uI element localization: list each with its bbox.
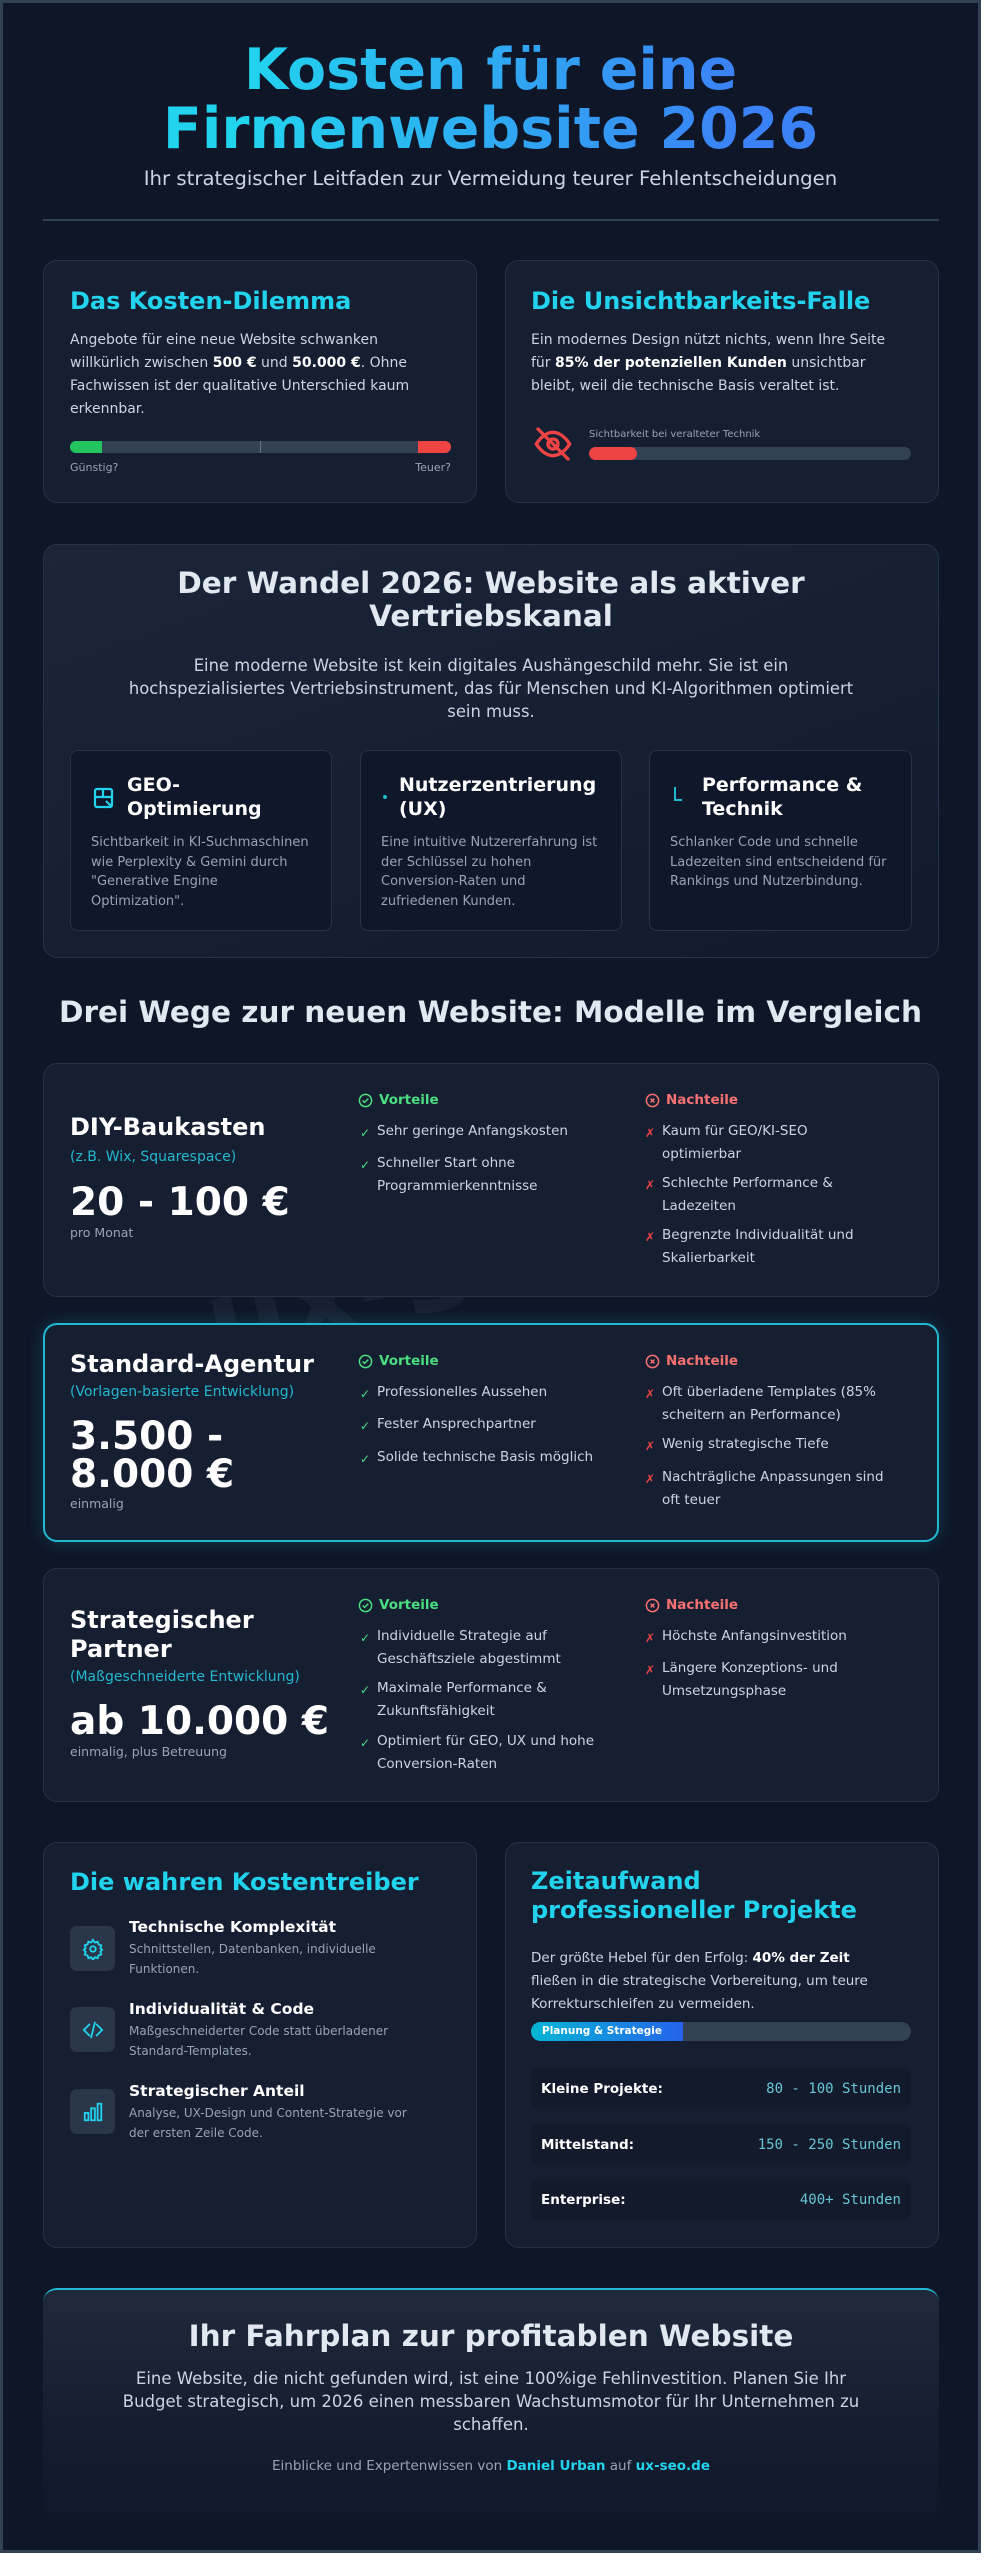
text: Kosten-Dilemma: willkürlich zwischen 500 € und 50.000 €. Ohne: [70, 355, 407, 371]
bar labels: Teuer?: [415, 461, 451, 474]
list: Standard Vorteile: Vorteile: [379, 1353, 439, 1369]
list: DIY Nachteile: Kaum für GEO/KI-SEO: [662, 1123, 808, 1139]
list: Partner Vorteile: Optimiert für GEO, UX und hohe: [377, 1733, 594, 1749]
list: Partner Nachteile: Umsetzungsphase: [662, 1682, 786, 1698]
row: Kleine Projekte: [531, 2068, 911, 2109]
icon: code: [70, 2007, 115, 2052]
text: Unsichtbarkeits-Falle: [531, 332, 885, 394]
row: Enterprise: Enterprise:: [541, 2192, 626, 2208]
model info: DIY: 20 - 100 €: [70, 1180, 290, 1225]
desc: GEO: Optimization".: [91, 894, 184, 909]
list: Partner Vorteile: ✓: [360, 1631, 370, 1645]
model info: Standard-Agentur: Standard-Agentur: [70, 1350, 314, 1378]
heading: Unsichtbarkeits-Falle: Die Unsichtbarkeits-Falle: [531, 287, 870, 315]
text: Fahrplan: schaffen.: [453, 2415, 529, 2434]
text: Kosten-Dilemma: Fachwissen ist der qualitative Unterschied kaum: [70, 378, 409, 394]
title: Firmenwebsite 2026: [163, 96, 818, 162]
model info: DIY: pro Monat: [70, 1225, 133, 1240]
list: DIY Nachteile: ✗: [645, 1178, 655, 1192]
list: Standard Nachteile: scheitern an Performance): [662, 1406, 841, 1422]
model info: Standard-Agentur: [70, 1350, 314, 1511]
list: Standard Nachteile: Nachteile: [666, 1353, 738, 1369]
title: Kosten für eine: [244, 37, 737, 103]
list: DIY Nachteile: Schlechte Performance &: [662, 1175, 833, 1191]
desc: Performance: [670, 835, 887, 889]
progress bar: Planung: Planung & Strategie: [542, 2025, 662, 2037]
subcard: GEO: [70, 750, 332, 931]
title: UX: [399, 774, 596, 820]
item: Strategischer Anteil: Strategischer Anteil: [129, 2082, 305, 2100]
item: Individualität & Code: [70, 2000, 388, 2058]
desc: UX: [381, 835, 597, 909]
list: Standard Nachteile: ✗: [645, 1472, 655, 1486]
icon: eye slash: [534, 427, 572, 461]
list: Partner Nachteile: Nachteile: [666, 1597, 738, 1613]
credit: Einblicke und Expertenwissen von Daniel Urban auf ux-seo.de: [272, 2458, 710, 2474]
panel: DIY-Baukasten: [43, 1063, 939, 1297]
text: Unsichtbarkeits-Falle: bleibt, weil die technische Basis veraltet ist.: [531, 378, 839, 394]
list: DIY Vorteile: Vorteile: [379, 1092, 439, 1108]
model info: Standard-Agentur: einmalig: [70, 1496, 124, 1511]
heading: Der Wandel: [177, 566, 805, 633]
desc: Performance: Schlanker Code und schnelle: [670, 835, 858, 850]
item: Strategischer Anteil: Analyse, UX-Design und Content-Strategie vor: [129, 2106, 407, 2120]
list: Partner Vorteile: Vorteile: [379, 1597, 439, 1613]
text: Wandel intro: hochspezialisiertes Vertriebsinstrument, das für Menschen und KI-Algorithmen optimiert: [129, 679, 853, 698]
list: Partner Vorteile: Individuelle Strategie auf: [377, 1628, 547, 1644]
panel: Zeitaufwand: [505, 1842, 939, 2248]
progress bar: Planung: [531, 2022, 911, 2041]
desc: GEO: "Generative Engine: [91, 874, 218, 889]
item: Strategischer Anteil: der ersten Zeile Code.: [129, 2126, 263, 2140]
list: DIY Nachteile: optimierbar: [662, 1146, 741, 1162]
bar labels: Günstig?: [70, 461, 118, 474]
panel: Standard-Agentur: [43, 1323, 939, 1542]
list: Partner Vorteile: Geschäftsziele abgestimmt: [377, 1650, 561, 1666]
list: Partner Vorteile: ✓: [360, 1683, 370, 1697]
list: DIY Nachteile: Nachteile: [666, 1092, 738, 1108]
list: Standard Nachteile: ✗: [645, 1439, 655, 1453]
icon: performance: [674, 787, 682, 801]
panel: Unsichtbarkeits-Falle: [505, 260, 939, 503]
list: DIY Nachteile: Skalierbarkeit: [662, 1250, 755, 1266]
text: Fahrplan: Budget strategisch, um 2026 einen messbaren Wachstumsmotor für Ihr Unternehmen zu: [123, 2392, 859, 2411]
text: Kosten-Dilemma: erkennbar.: [70, 401, 145, 417]
heading: Kostentreiber: Die wahren Kostentreiber: [70, 1868, 419, 1896]
row: Enterprise: [531, 2179, 911, 2220]
list: Standard Nachteile: Wenig strategische Tiefe: [662, 1436, 829, 1452]
list: DIY Vorteile: [358, 1092, 568, 1194]
desc: UX: der Schlüssel zu hohen: [381, 855, 531, 870]
list: Partner Nachteile: Höchste Anfangsinvestition: [662, 1628, 847, 1644]
model info: Strategischer Partner: einmalig, plus Betreuung: [70, 1744, 227, 1759]
model info: Strategischer Partner: [70, 1606, 329, 1759]
list: Standard Nachteile: Nachträgliche Anpassungen sind: [662, 1469, 884, 1485]
list: Partner Nachteile: ✗: [645, 1631, 655, 1645]
list: DIY Nachteile: ✗: [645, 1230, 655, 1244]
text: Kosten-Dilemma: [70, 332, 409, 417]
item: Technische Komplexität: Technische Komplexität: [129, 1918, 336, 1936]
heading: Fahrplan: Ihr Fahrplan zur profitablen Website: [189, 2319, 793, 2353]
text: Wandel intro: Eine moderne Website ist kein digitales Aushängeschild mehr. Sie ist ein: [194, 656, 788, 675]
list: Partner Nachteile: Längere Konzeptions- und: [662, 1660, 838, 1676]
title: UX: Nutzerzentrierung: [399, 774, 596, 796]
heading: Zeitaufwand: Zeitaufwand: [531, 1867, 701, 1895]
visibility label: Sichtbarkeit bei veralteter Technik: [589, 429, 760, 440]
item: Individualität & Code: Maßgeschneiderter Code statt überladener: [129, 2024, 388, 2038]
title: GEO: [127, 774, 262, 820]
list: Standard Vorteile: ✓: [360, 1452, 370, 1466]
bar labels: [70, 461, 451, 474]
desc: GEO: wie Perplexity & Gemini durch: [91, 855, 288, 870]
subtitle: Ihr strategischer Leitfaden zur Vermeidung teurer Fehlentscheidungen: [144, 167, 837, 190]
list: Partner Vorteile: ✓: [360, 1736, 370, 1750]
model info: Strategischer Partner: Strategischer: [70, 1606, 254, 1634]
text: Kosten-Dilemma: Angebote für eine neue Website schwanken: [70, 332, 378, 348]
list: Partner Vorteile: [358, 1597, 594, 1772]
text: Fahrplan: [123, 2369, 859, 2434]
price scale bar: [70, 441, 451, 453]
subcard: Performance: [649, 750, 912, 931]
heading: Der Wandel: Vertriebskanal: [369, 599, 613, 633]
title: UX: (UX): [399, 798, 446, 820]
row: Kleine Projekte: 80 - 100 Stunden: [766, 2080, 901, 2096]
item: Technische Komplexität: [70, 1918, 376, 1976]
text: Wandel intro: sein muss.: [447, 702, 535, 721]
title: Performance: Performance &: [702, 774, 862, 796]
text: Fahrplan: Eine Website, die nicht gefunden wird, ist eine 100%ige Fehlinvestition. Planen Sie Ihr: [136, 2369, 846, 2388]
desc: UX: zufriedenen Kunden.: [381, 894, 515, 909]
list: DIY Vorteile: Sehr geringe Anfangskosten: [377, 1123, 568, 1139]
list: Standard Vorteile: ✓: [360, 1419, 370, 1433]
row: Mittelstand: 150 - 250 Stunden: [758, 2136, 901, 2152]
list: DIY Vorteile: Schneller Start ohne: [377, 1155, 515, 1171]
heading: Zeitaufwand: professioneller Projekte: [531, 1896, 857, 1924]
list: DIY Vorteile: Programmierkenntnisse: [377, 1178, 537, 1194]
list: Standard Nachteile: oft teuer: [662, 1492, 720, 1508]
model info: Standard-Agentur: 8.000 €: [70, 1452, 234, 1497]
visibility bar: [589, 447, 911, 460]
text: Unsichtbarkeits-Falle: Ein modernes Design nützt nichts, wenn Ihre Seite: [531, 332, 885, 348]
text: Unsichtbarkeits-Falle: für 85% der potenziellen Kunden unsichtbar: [531, 355, 866, 371]
list: DIY Nachteile: Ladezeiten: [662, 1198, 736, 1214]
list: DIY Nachteile: ✗: [645, 1126, 655, 1140]
panel: Der Wandel: [43, 544, 939, 958]
subcard: UX: [360, 750, 622, 931]
heading: Drei Wege: Drei Wege zur neuen Website: Modelle im Vergleich: [59, 995, 922, 1029]
model info: Standard-Agentur: (Vorlagen-basierte Entwicklung): [70, 1384, 294, 1400]
row: Mittelstand: Mittelstand:: [541, 2136, 634, 2152]
desc: Performance: Ladezeiten sind entscheidend für: [670, 855, 887, 870]
list: Partner Vorteile: Conversion-Raten: [377, 1756, 497, 1772]
model info: DIY: (z.B. Wix, Squarespace): [70, 1149, 236, 1165]
desc: UX: Conversion-Raten und: [381, 874, 526, 889]
item: Strategischer Anteil: [70, 2082, 407, 2140]
icon: UX: [383, 795, 387, 799]
list: DIY Nachteile: Begrenzte Individualität und: [662, 1227, 854, 1243]
item: Technische Komplexität: Funktionen.: [129, 1962, 199, 1976]
heading: Zeitaufwand: [531, 1867, 857, 1924]
list: DIY Nachteile: [645, 1092, 854, 1266]
list: DIY Vorteile: ✓: [360, 1126, 370, 1140]
model info: Strategischer Partner: (Maßgeschneiderte Entwicklung): [70, 1669, 300, 1685]
model info: Strategischer Partner: ab 10.000 €: [70, 1699, 329, 1744]
text: Zeitaufwand: Korrekturschleifen zu vermeiden.: [531, 1996, 755, 2012]
model info: Standard-Agentur: 3.500 -: [70, 1414, 223, 1459]
model info: DIY: DIY-Baukasten: [70, 1113, 266, 1141]
icon: chart: [70, 2089, 115, 2134]
desc: UX: Eine intuitive Nutzererfahrung ist: [381, 835, 597, 850]
title: [0, 41, 981, 159]
row: Mittelstand: [531, 2124, 911, 2165]
model info: Strategischer Partner: Partner: [70, 1635, 172, 1663]
text: Wandel intro: [129, 656, 853, 721]
item: Individualität & Code: Standard-Templates.: [129, 2044, 252, 2058]
panel: Kostentreiber: [43, 1842, 477, 2248]
title: GEO: GEO-: [127, 774, 180, 796]
text: Zeitaufwand: Der größte Hebel für den Erfolg: 40% der Zeit: [531, 1950, 850, 1966]
text: Zeitaufwand: [531, 1950, 868, 2012]
list: DIY Vorteile: ✓: [360, 1158, 370, 1172]
icon: gear: [70, 1926, 115, 1971]
item: Technische Komplexität: Schnittstellen, Datenbanken, individuelle: [129, 1942, 376, 1956]
model info: DIY: [70, 1113, 290, 1240]
icon: GEO: [94, 788, 114, 808]
panel: Strategischer Partner: [43, 1568, 939, 1802]
text: Zeitaufwand: fließen in die strategische Vorbereitung, um teure: [531, 1973, 868, 1989]
list: Standard Vorteile: ✓: [360, 1387, 370, 1401]
item: Individualität & Code: Individualität & Code: [129, 2000, 314, 2018]
list: Partner Nachteile: [645, 1597, 847, 1698]
row: Kleine Projekte: Kleine Projekte:: [541, 2080, 663, 2096]
panel: Fahrplan: [43, 2288, 939, 2516]
list: Standard Vorteile: [358, 1353, 593, 1466]
list: Standard Nachteile: Oft überladene Templates (85%: [662, 1384, 876, 1400]
list: Standard Nachteile: ✗: [645, 1387, 655, 1401]
heading: Der Wandel: Der Wandel 2026: Website als aktiver: [177, 566, 805, 600]
list: Standard Vorteile: Solide technische Basis möglich: [377, 1449, 593, 1465]
list: Standard Vorteile: Fester Ansprechpartner: [377, 1416, 536, 1432]
heading: Kosten-Dilemma: Das Kosten-Dilemma: [70, 287, 351, 315]
desc: GEO: [91, 835, 309, 909]
title: Performance: Technik: [702, 798, 783, 820]
title: GEO: Optimierung: [127, 798, 262, 820]
list: Partner Vorteile: Zukunftsfähigkeit: [377, 1702, 495, 1718]
list: Standard Nachteile: [645, 1353, 884, 1508]
panel: Kosten-Dilemma: [43, 260, 477, 503]
list: Partner Nachteile: ✗: [645, 1663, 655, 1677]
desc: GEO: Sichtbarkeit in KI-Suchmaschinen: [91, 835, 309, 850]
desc: Performance: Rankings und Nutzerbindung.: [670, 874, 863, 889]
title: Performance: [702, 774, 862, 820]
list: Standard Vorteile: Professionelles Aussehen: [377, 1384, 547, 1400]
row: Enterprise: 400+ Stunden: [800, 2192, 901, 2208]
list: Partner Vorteile: Maximale Performance &: [377, 1680, 547, 1696]
watermark: ux-seo.de: [193, 1122, 823, 1388]
